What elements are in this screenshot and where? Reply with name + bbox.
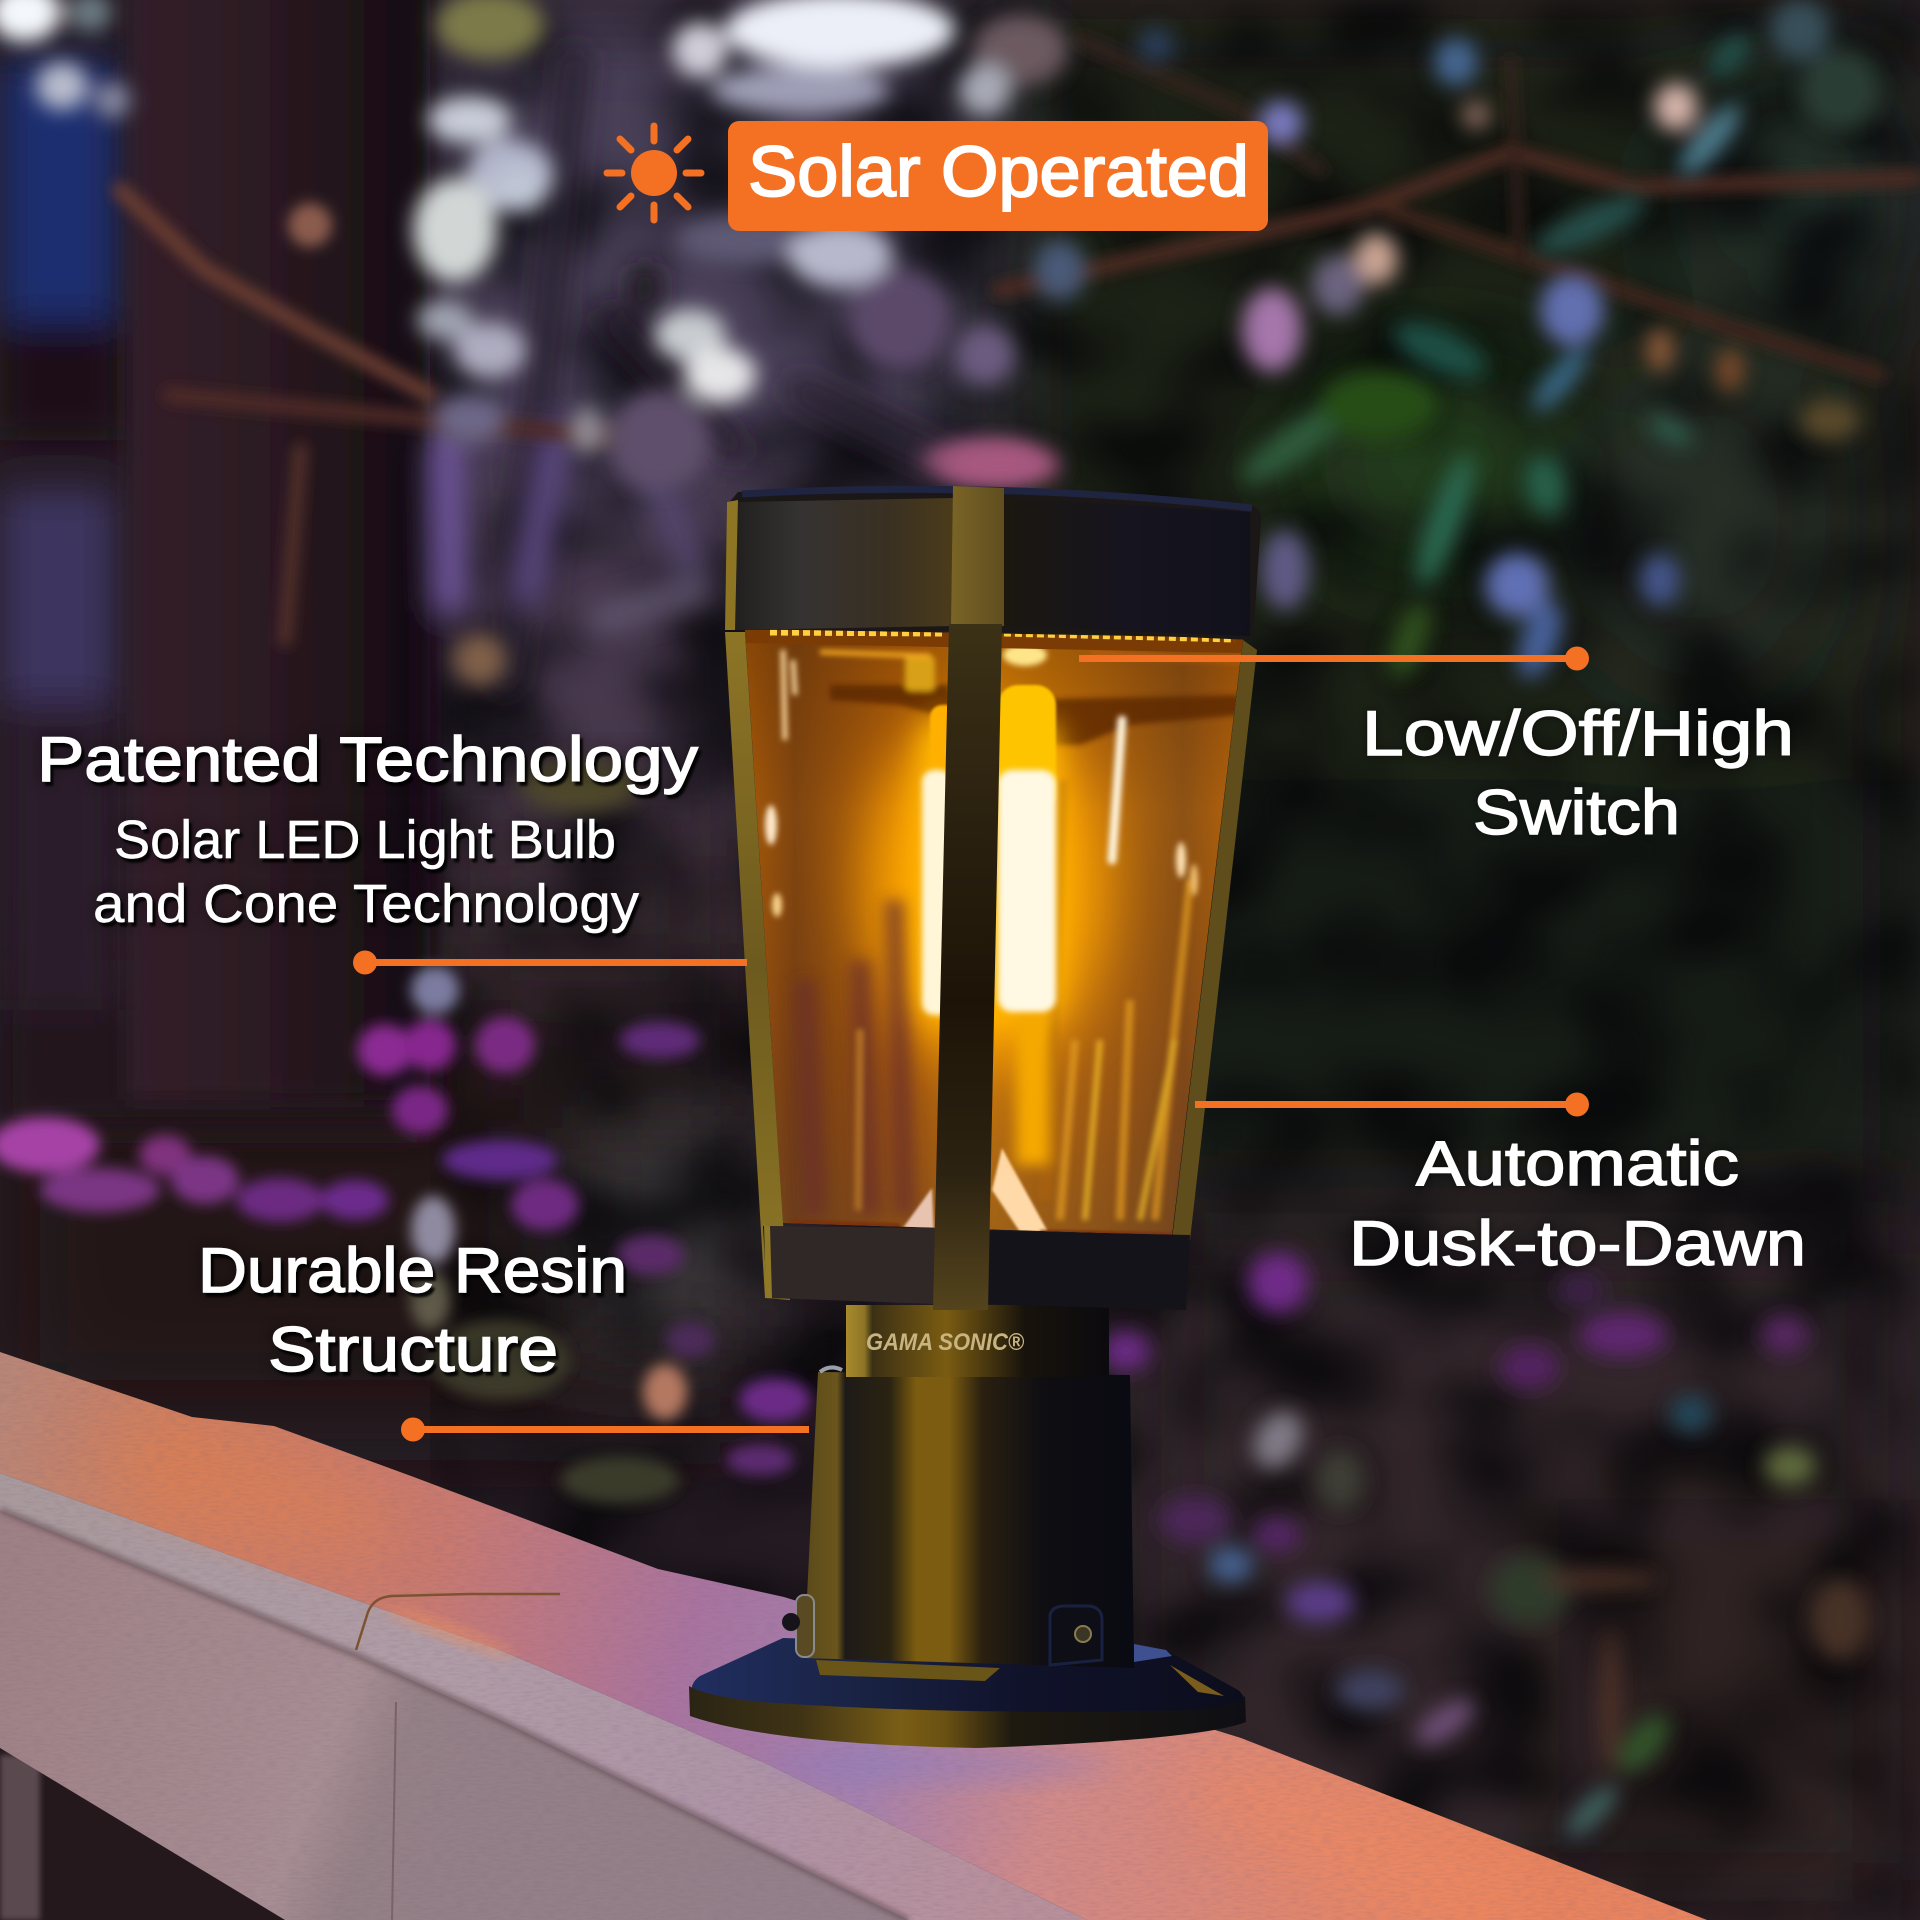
lantern: top cap <box>725 487 1261 640</box>
callout text: patented technology: Solar LED Light Bulb <box>114 810 616 870</box>
background: blossoms, lower right <box>1102 1253 1870 1843</box>
lantern: centre strap on cap <box>951 486 1004 626</box>
heading badge: Solar Operated <box>728 121 1268 231</box>
callout text: dusk-to-dawn: Dusk-to-Dawn <box>1349 1209 1806 1279</box>
callout: Patented Technology <box>37 725 747 974</box>
glass: warm glow <box>870 720 1100 1060</box>
callout text: durable resin: Durable Resin <box>198 1236 627 1306</box>
callout text: dusk-to-dawn: Automatic <box>1416 1129 1739 1199</box>
railing: wood joint crack <box>356 1594 560 1650</box>
callout: Automatic Dusk-to-Dawn <box>1195 1092 1806 1279</box>
lantern: left gold frame <box>725 632 790 1300</box>
base: highlight strip <box>816 1660 1000 1681</box>
deck railing <box>0 1340 1720 1920</box>
cap: left panel <box>735 498 953 630</box>
callout text: patented technology: and Cone Technology <box>93 874 639 934</box>
lantern: right screw bracket <box>1050 1606 1102 1665</box>
background: dark saplings and lilac streaks behind lantern <box>425 60 960 900</box>
glass: inner top mechanism <box>820 644 1240 745</box>
callout line: switch <box>1079 646 1589 670</box>
glass: reflections <box>765 650 1198 917</box>
lantern: glass body <box>745 629 1243 1235</box>
background: organic dark patches <box>430 0 1920 1920</box>
base: pale corner <box>1134 1644 1172 1662</box>
callout line: patented technology <box>353 950 747 974</box>
lantern: bottom band <box>763 1226 1190 1310</box>
lantern: post left edge highlight <box>820 1367 842 1372</box>
callout text: switch <box>1362 699 1794 848</box>
cap: gold left edge <box>725 500 738 630</box>
background: white and lilac bokeh <box>0 0 1040 811</box>
background: coloured leaves and blossoms, upper right <box>940 0 1880 684</box>
lantern: centre vertical bar <box>933 624 1002 1310</box>
lantern product <box>689 486 1261 1748</box>
icon: sun <box>607 126 701 220</box>
glass: bottom sparkle cone <box>790 1148 1172 1235</box>
lantern: base plate <box>689 1638 1246 1748</box>
callout: Durable Resin Structure <box>198 1236 809 1442</box>
base: right notch <box>1170 1665 1224 1696</box>
railing: front face <box>0 1505 908 1920</box>
lantern: neck <box>846 1305 1109 1377</box>
background: tree trunk <box>128 0 430 1100</box>
lantern: right gold frame <box>1172 640 1257 1240</box>
glass: LED ring <box>745 631 1243 644</box>
railing: baluster <box>0 1755 40 1920</box>
callout line: durable resin <box>401 1418 809 1442</box>
background: tree branches <box>120 40 1915 640</box>
callout text: patented technology: Patented Technology <box>37 725 699 795</box>
callout text: dusk-to-dawn <box>1349 1129 1806 1279</box>
lantern: left screw bracket <box>782 1595 814 1657</box>
callout text: durable resin: Structure <box>268 1315 558 1385</box>
railing: lighting on surfaces <box>0 1340 1720 1920</box>
railing: nosing under-shadow <box>0 1510 908 1920</box>
cap: right panel <box>1004 498 1250 636</box>
glass: vertical ribs <box>805 780 1190 1220</box>
background: left column <box>0 60 430 1130</box>
railing: rounded nosing <box>0 1473 1087 1920</box>
callout text: durable resin <box>198 1236 627 1385</box>
cap: top lip <box>742 489 1252 508</box>
glass: LED flame bulb <box>920 685 1060 1165</box>
railing: top surface <box>0 1352 1707 1920</box>
railing: board seam <box>392 1702 396 1920</box>
callout text: patented technology <box>37 725 699 934</box>
callout line: dusk-to-dawn <box>1195 1092 1589 1116</box>
lantern: lower post <box>804 1372 1134 1668</box>
lantern: brand text: GAMA SONIC® <box>866 1329 1024 1356</box>
base: rim <box>689 1686 1246 1748</box>
callout text: switch: Switch <box>1473 778 1680 848</box>
railing: dark gap below <box>0 1740 300 1920</box>
background: purple flowers, lower left <box>0 966 811 1504</box>
callout: Low/Off/High Switch <box>1079 646 1794 848</box>
heading badge: Solar Operated: Solar Operated <box>748 133 1249 212</box>
callout text: switch: Low/Off/High <box>1362 699 1794 769</box>
base: top cone <box>690 1638 1245 1712</box>
